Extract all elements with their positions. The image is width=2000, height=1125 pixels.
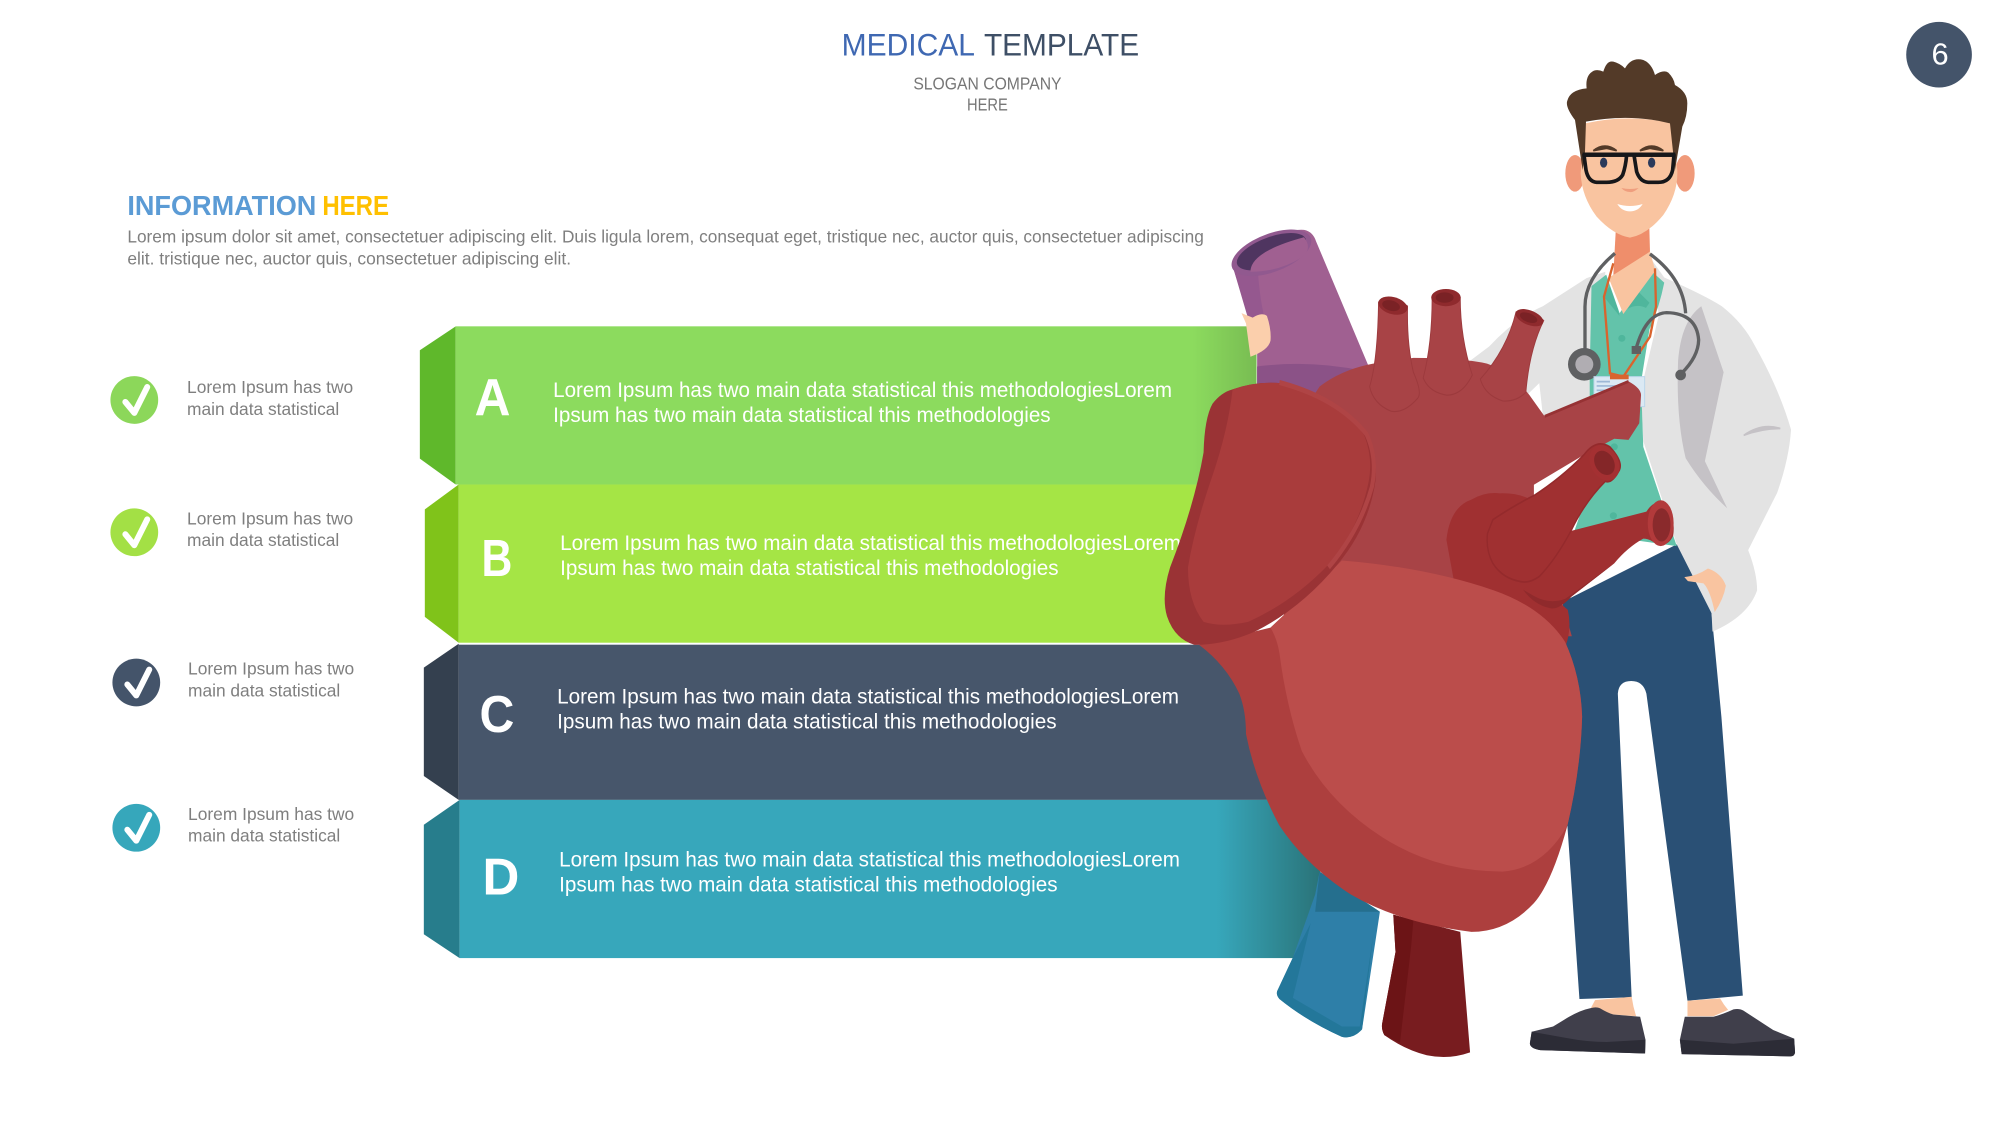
title: TEMPLATE [984, 27, 1139, 63]
title: MEDICAL [842, 27, 975, 63]
section heading: HERE [322, 190, 389, 221]
panel: bar A: Lorem Ipsum has two main data statistical this methodologiesLorem [553, 379, 1172, 402]
panel: bar A: Ipsum has two main data statistical this methodologies [553, 404, 1051, 427]
checklist item 1 [110, 376, 353, 424]
doctor: lab coat [1462, 257, 1791, 632]
doctor: trousers [1563, 544, 1743, 1001]
section heading: INFORMATION [127, 190, 316, 221]
panel: bar A: A [475, 368, 510, 426]
doctor: neck [1608, 227, 1655, 314]
doctor: stethoscope and lanyard [1568, 253, 1699, 407]
panel: bar C [424, 644, 1284, 800]
checklist item 4: Lorem Ipsum has two [188, 804, 354, 824]
doctor: shoes [1530, 997, 1795, 1056]
checklist item 2 [110, 508, 353, 556]
heart: left atrium lobe [1165, 383, 1376, 645]
doctor: shirt [1574, 269, 1677, 546]
checklist item 4 [112, 804, 354, 852]
panel: bar B [425, 485, 1225, 643]
panel: bar C: Ipsum has two main data statistical this methodologies [557, 710, 1057, 733]
checklist item 1: main data statistical [187, 399, 339, 419]
doctor: hand in pocket [1684, 569, 1726, 612]
panel: bar C: Lorem Ipsum has two main data statistical this methodologiesLorem [557, 685, 1179, 708]
panel: bar B: Ipsum has two main data statistical this methodologies [560, 557, 1059, 580]
doctor's other hand [1242, 313, 1271, 357]
panel: bar B: Lorem Ipsum has two main data statistical this methodologiesLorem [560, 532, 1181, 555]
heart illustration [1165, 220, 1674, 1057]
checklist item 2: Lorem Ipsum has two [187, 508, 353, 528]
checklist item 3: main data statistical [188, 680, 340, 700]
heart: upper body [1284, 358, 1641, 636]
checklist item 3 [112, 659, 354, 706]
page number badge [1906, 22, 1972, 88]
heart: three top vessels [1370, 289, 1545, 412]
heart: ventricle [1199, 560, 1582, 932]
panel: bar A [420, 326, 1257, 485]
page number badge: 6 [1931, 37, 1949, 72]
doctor illustration [1462, 59, 1795, 1056]
intro paragraph: Lorem ipsum dolor sit amet, consectetuer adipiscing elit. Duis ligula lorem, consequat eget, tristique nec, auctor quis, consectetuer adipiscing [127, 227, 1204, 247]
panel: bar D: D [483, 847, 519, 905]
panel: bar D [424, 800, 1320, 958]
intro paragraph [127, 227, 1204, 269]
intro paragraph: elit. tristique nec, auctor quis, consectetuer adipiscing elit. [127, 249, 571, 269]
checklist item 1: Lorem Ipsum has two [187, 377, 353, 397]
checklist item 4: main data statistical [188, 826, 340, 846]
subtitle [913, 74, 1062, 114]
vessel: purple pulmonary trunk [1228, 220, 1371, 395]
panel: bar D: Lorem Ipsum has two main data statistical this methodologiesLorem [559, 849, 1180, 872]
checklist item 3: Lorem Ipsum has two [188, 659, 354, 679]
subtitle: HERE [967, 94, 1008, 114]
vessel: blue vena cava [1277, 872, 1380, 1037]
title [842, 27, 1139, 63]
panel: bar B: B [482, 529, 512, 587]
vessel: dark red aorta [1382, 915, 1470, 1057]
heart: right vessels [1446, 438, 1674, 645]
panel: bar D: Ipsum has two main data statistical this methodologies [559, 873, 1058, 896]
subtitle: SLOGAN COMPANY [913, 74, 1062, 94]
checklist item 2: main data statistical [187, 530, 339, 550]
panel: bar C: C [480, 685, 514, 743]
doctor: head [1565, 59, 1695, 238]
